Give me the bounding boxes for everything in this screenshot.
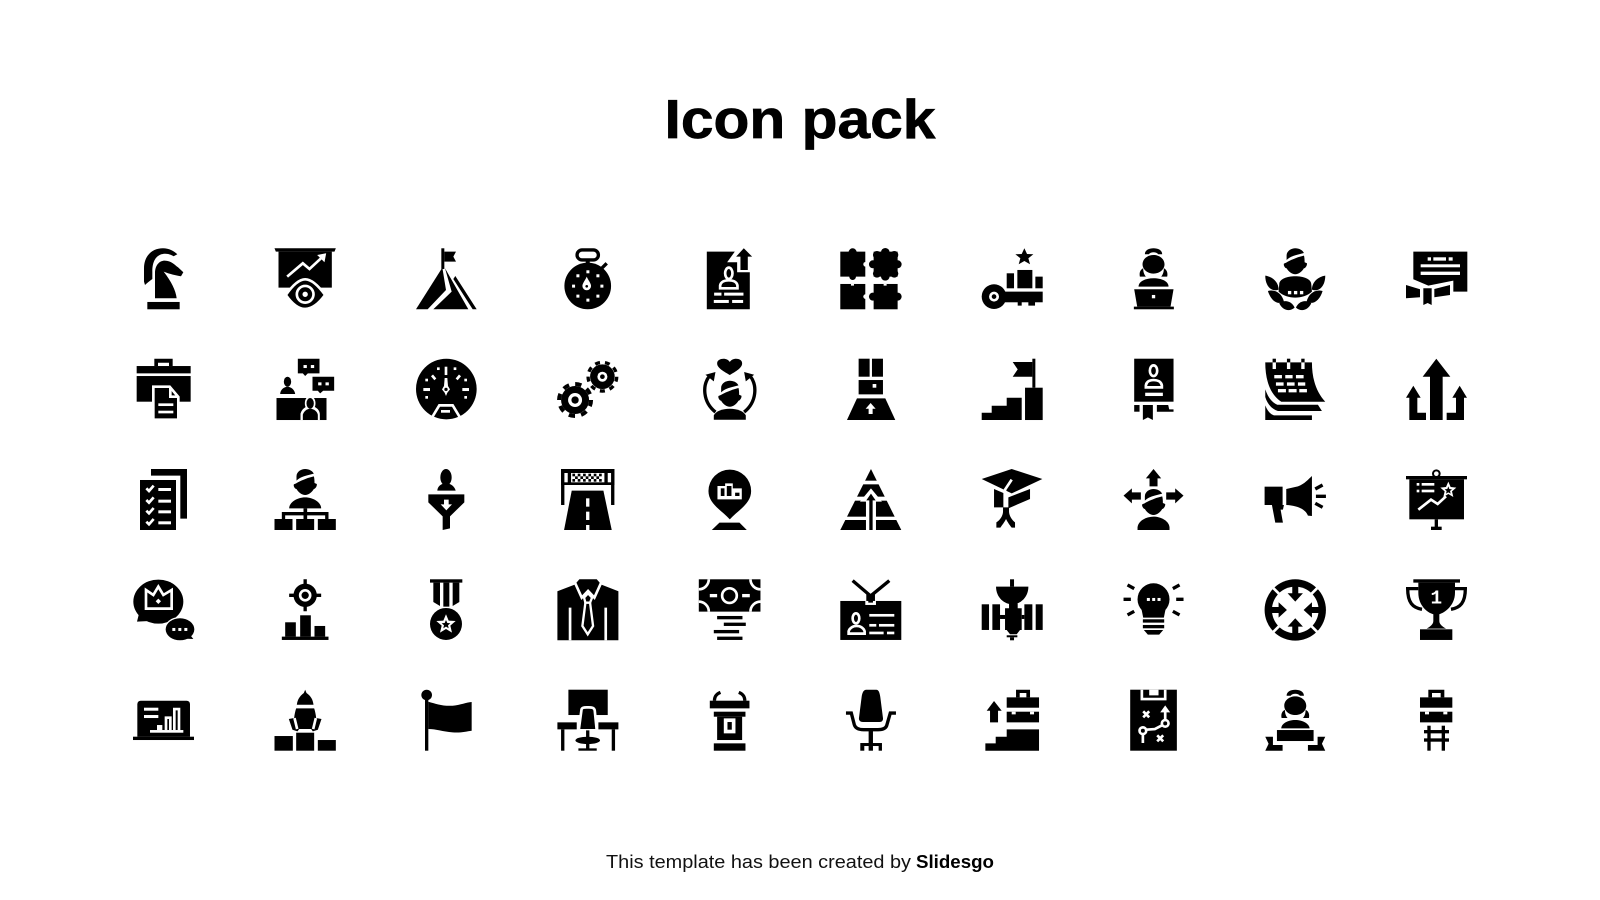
icon: circle with arrows pointing inward [1265, 579, 1326, 641]
icon: resume with up arrow [707, 248, 752, 309]
icon: speech podium [710, 692, 749, 751]
icon: target over podium [282, 579, 328, 640]
icon: key with podium and star [982, 248, 1043, 309]
icon: person with laurel wreath [1265, 248, 1325, 310]
icon: medal with star [430, 579, 462, 640]
icon: waving flag [421, 690, 472, 751]
icon: person on banner [1265, 690, 1325, 751]
icon: stacked blocks with up arrow [847, 359, 895, 420]
icon: person over org chart [274, 469, 336, 530]
icon: briefcase on rail track [1420, 690, 1452, 751]
icon: office chair [846, 690, 896, 751]
icon: suit and tie [557, 579, 618, 640]
icon: pyramid with arrow [840, 469, 901, 530]
icon: megaphone [1265, 476, 1326, 523]
icon: stairs with flag [982, 359, 1043, 420]
footer credit: Slidesgo [916, 851, 994, 872]
icon: knight chess piece [144, 248, 183, 309]
title: Icon pack [664, 88, 936, 150]
icon: stack of money [699, 579, 760, 640]
icon: trophy number one [1408, 579, 1465, 640]
icon: road with finish line [561, 469, 614, 530]
icon: rocket on blocks [274, 690, 336, 751]
icon: meeting with speech bubbles [276, 359, 334, 420]
icon: checklist documents [140, 469, 187, 530]
icon: briefcase with document [137, 359, 191, 420]
icon: ID badge with lanyard [840, 581, 901, 640]
icon: presentation board with star [1406, 470, 1467, 530]
icon: satellite [982, 579, 1043, 640]
icon: puzzle pieces [840, 248, 902, 309]
icon: office desk and chair [557, 690, 618, 751]
icon: person over funnel [428, 469, 464, 530]
icon: mountain with flag [416, 248, 477, 309]
icon: light bulb with idea dots [1124, 583, 1184, 635]
icon: speech bubbles with crown [133, 580, 196, 642]
icon: briefcase on stairs with arrow [985, 690, 1039, 751]
icon: presentation board with eye [274, 248, 336, 309]
icon: person at laptop [1134, 248, 1174, 309]
icon: speedometer [416, 359, 477, 419]
icon: location pin with podium [708, 470, 751, 530]
icon: person with directional arrows [1124, 469, 1184, 530]
icon: gears [559, 362, 617, 416]
icon: stopwatch [564, 250, 611, 309]
icon: strategy clipboard [1130, 690, 1177, 751]
icon: laptop with chart [133, 701, 194, 740]
icon: certificate with ribbon [1406, 252, 1467, 305]
footer credit: This template has been created by [606, 851, 912, 872]
icon: person on book [1134, 359, 1174, 420]
icon: calendar pages [1265, 359, 1325, 420]
icon: trophy number one: 1 [1431, 587, 1442, 609]
icon: growth arrows [1406, 359, 1467, 420]
icon: graduation cap [982, 469, 1042, 528]
icon: person with heart and cycle arrows [705, 359, 755, 420]
